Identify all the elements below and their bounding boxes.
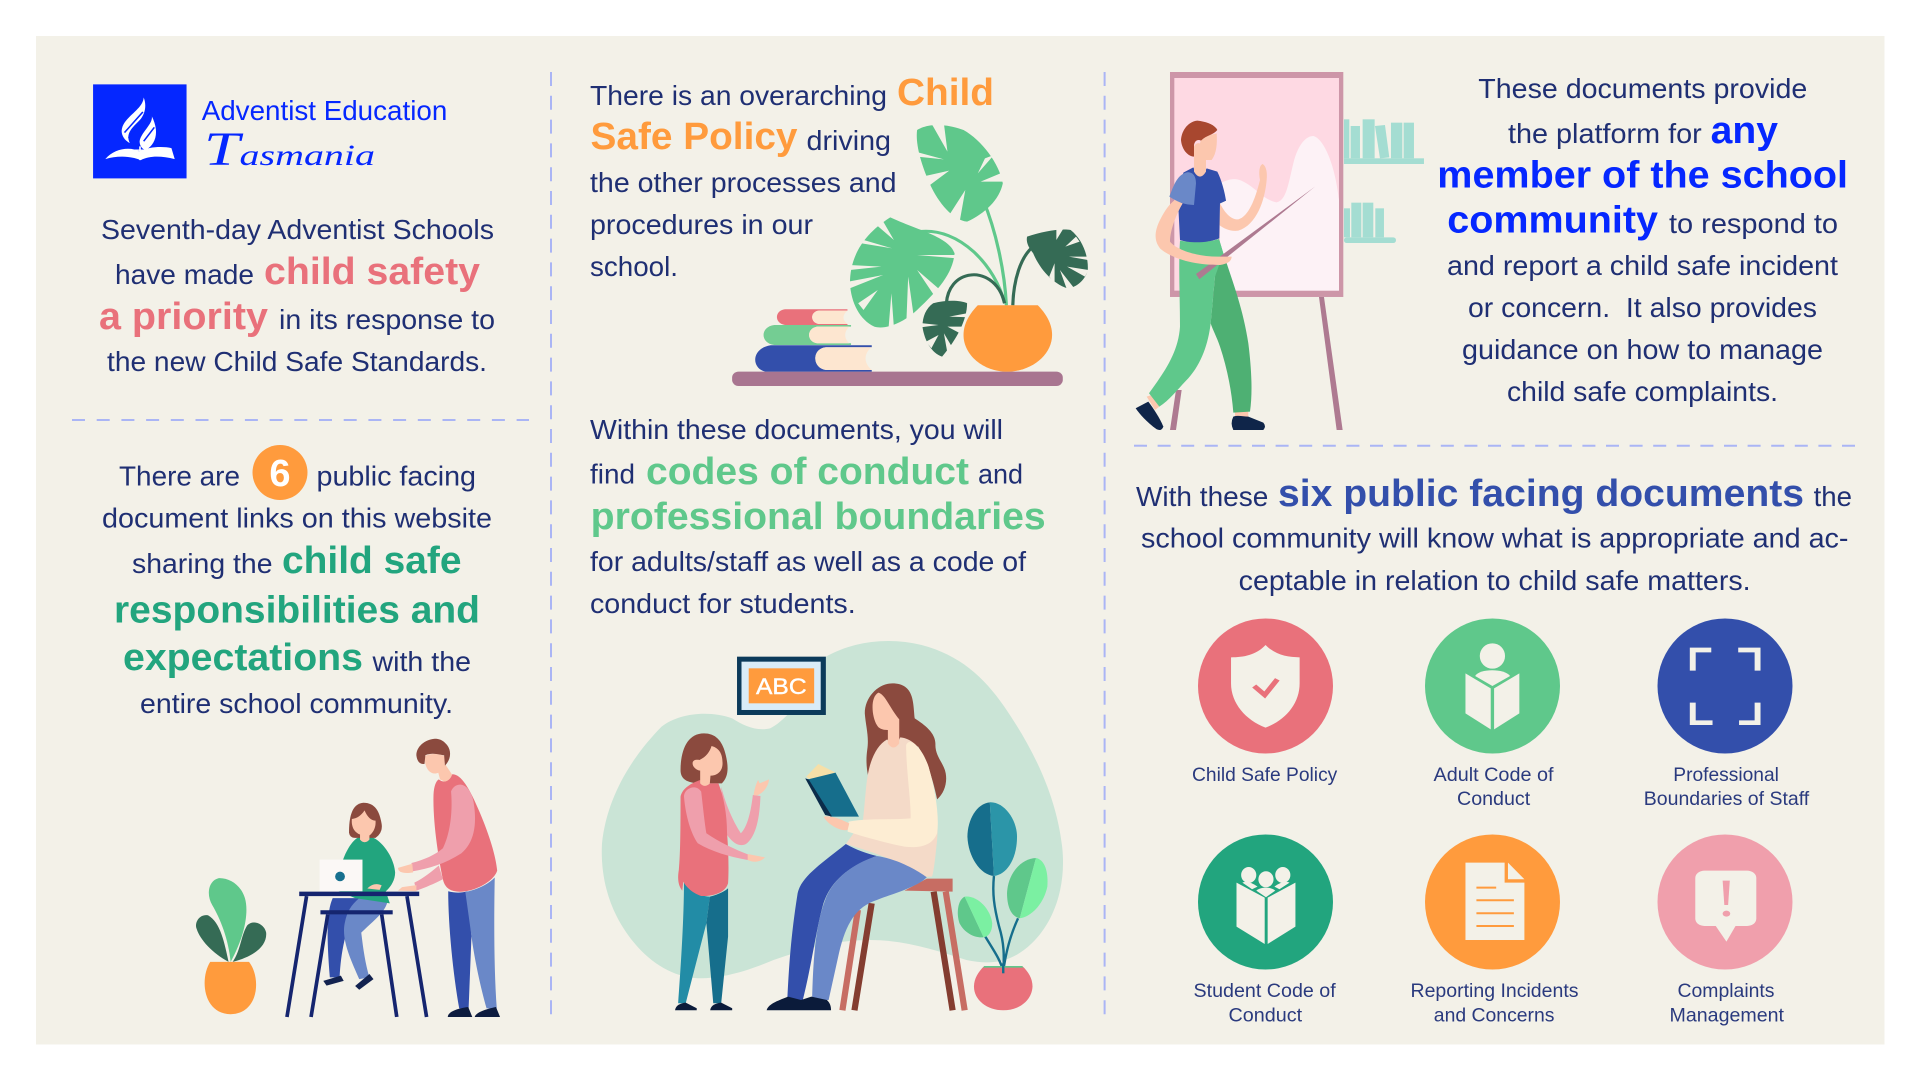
text block: six public facing documents: six public facing documents: [1278, 473, 1804, 515]
logo script: Tasmania: T asmania: [204, 123, 375, 176]
text block: 6 public facing document links: public facing: [316, 460, 476, 492]
text block: six public facing documents: school community will know what is appropriate and ac-: [1141, 522, 1848, 553]
easel legs: [1170, 297, 1343, 430]
text block: 6 public facing document links: expectations: [123, 637, 363, 679]
document icon: Student Code of Conduct: Student Code of: [1194, 980, 1336, 1002]
leaf: top monstera: [915, 123, 1005, 222]
text block: six public facing documents: [1136, 473, 1852, 596]
easel board with chart: [1170, 72, 1343, 297]
icon: potted plant: [196, 878, 266, 1014]
text block: platform for any member: member of the school: [1437, 155, 1848, 197]
text block: six public facing documents: With these: [1136, 481, 1268, 512]
document icon: Adult Code of Conduct: [1425, 618, 1560, 810]
text block: child safety priority: child safety: [264, 251, 480, 293]
text block: Child Safe Policy: the other processes and: [590, 167, 896, 198]
text block: Child Safe Policy: [590, 72, 994, 282]
text block: 6 public facing document links: There are: [119, 460, 240, 492]
text block: platform for any member: to respond to: [1669, 208, 1838, 239]
text block: 6 public facing document links: entire school community.: [140, 688, 453, 719]
text block: child safety priority: [99, 214, 495, 377]
child figure: [675, 733, 769, 1010]
logo wordmark: Adventist Education: [202, 95, 447, 126]
teacher figure: [767, 683, 946, 1010]
plant with red pot: [958, 802, 1048, 1010]
text block: 6 public facing document links: sharing the: [132, 548, 272, 579]
illustration: shelf with books and monstera plant: [732, 123, 1089, 386]
man standing: [398, 739, 500, 1017]
document icon: Adult Code of Conduct: Adult Code of: [1434, 764, 1554, 786]
illustration: teacher reading to child: [602, 641, 1063, 1010]
text block: 6 public facing document links: responsibilities and: [114, 590, 480, 632]
text block: platform for any member: guidance on how to manage: [1462, 334, 1823, 365]
text block: platform for any member: child safe complaints.: [1507, 376, 1778, 407]
logo: Adventist Education Tasmania: [93, 84, 447, 178]
book in hand: [805, 764, 859, 817]
document icon: Professional Boundaries of Staff: Professional: [1673, 764, 1779, 786]
text block: codes of conduct and professional boundaries: codes of conduct: [646, 451, 969, 493]
text block: codes of conduct and professional boundaries: find: [590, 458, 635, 490]
document icon: Complaints Management: Management: [1670, 1005, 1785, 1027]
text block: child safety priority: have made: [115, 259, 254, 290]
background blob: [602, 641, 1063, 978]
bookshelves: [1344, 119, 1424, 243]
text block: platform for any member: [1437, 73, 1848, 407]
leaf: dark small monstera: [921, 301, 968, 357]
badge: number 6: [252, 445, 308, 500]
books: [755, 309, 872, 372]
text block: Child Safe Policy: driving: [806, 125, 891, 156]
text block: child safety priority: Seventh-day Adventist Schools: [101, 214, 494, 245]
text block: six public facing documents: the: [1814, 481, 1852, 512]
text block: 6 public facing document links: document links on this website: [102, 502, 492, 534]
illustration: presenter at easel: [1136, 72, 1424, 430]
badge: number 6: 6: [269, 453, 291, 495]
document icon: Professional Boundaries of Staff: Boundaries of Staff: [1644, 788, 1810, 810]
document icon: Professional Boundaries of Staff: [1644, 618, 1810, 810]
text block: 6 public facing document links: [102, 445, 492, 719]
text block: Child Safe Policy: There is an overarching: [590, 80, 887, 111]
shelf: [732, 372, 1063, 386]
text block: platform for any member: These documents provide: [1478, 73, 1807, 104]
leaf: dark right monstera: [1027, 227, 1089, 290]
document icon: Complaints Management: [1658, 834, 1792, 1027]
document icon: Student Code of Conduct: Conduct: [1228, 1005, 1303, 1027]
leaf: left monstera: [849, 217, 956, 328]
text block: Child Safe Policy: school.: [590, 251, 678, 282]
icon: flame and book emblem: [93, 84, 187, 178]
stool: [842, 879, 965, 1010]
text block: codes of conduct and professional boundaries: and: [978, 458, 1023, 490]
text block: 6 public facing document links: with the: [371, 646, 471, 677]
text block: platform for any member: and report a child safe incident: [1447, 250, 1838, 281]
illustration: adult helping child at laptop: [196, 739, 500, 1017]
document icon: Reporting Incidents and Concerns: Reporting Incidents: [1410, 980, 1579, 1002]
document icon: Reporting Incidents and Concerns: and Concerns: [1434, 1005, 1555, 1027]
document icon: Complaints Management: Complaints: [1678, 980, 1775, 1002]
text block: child safety priority: in its response to: [279, 304, 495, 335]
text block: platform for any member: the platform for: [1508, 118, 1702, 149]
presenter figure: [1136, 121, 1315, 430]
text block: Child Safe Policy: Safe Policy: [590, 116, 798, 158]
text block: codes of conduct and professional boundaries: for adults/staff as well as a code of: [590, 546, 1026, 577]
document icon: Child Safe Policy: [1192, 618, 1338, 786]
document icon: Adult Code of Conduct: Conduct: [1457, 788, 1531, 810]
ABC label: ABC: [756, 674, 807, 699]
plant stems: [919, 200, 1033, 305]
girl seated: [320, 803, 395, 990]
text block: codes of conduct and professional boundaries: professional boundaries: [591, 496, 1046, 538]
text block: Child Safe Policy: Child: [897, 72, 994, 114]
text block: child safety priority: a priority: [99, 296, 268, 338]
document icon: Child Safe Policy: Child Safe Policy: [1192, 764, 1338, 786]
text block: codes of conduct and professional boundaries: Within these documents, you will: [590, 414, 1003, 445]
text block: child safety priority: the new Child Safe Standards.: [107, 346, 487, 377]
table and stool: [287, 892, 427, 1017]
ABC frame: [737, 657, 826, 715]
text block: platform for any member: or concern. It also provides: [1468, 292, 1817, 323]
text block: platform for any member: community: [1447, 200, 1658, 242]
text block: six public facing documents: ceptable in relation to child safe matters.: [1239, 565, 1751, 596]
document icon: Student Code of Conduct: [1194, 834, 1336, 1027]
document icon: Reporting Incidents and Concerns: [1410, 834, 1579, 1027]
text block: codes of conduct and professional boundaries: [590, 414, 1046, 619]
text block: 6 public facing document links: child safe: [282, 540, 462, 582]
text block: platform for any member: any: [1711, 110, 1778, 152]
text block: codes of conduct and professional boundaries: conduct for students.: [590, 588, 856, 619]
text block: Child Safe Policy: procedures in our: [590, 209, 813, 240]
orange pot: [964, 305, 1052, 372]
